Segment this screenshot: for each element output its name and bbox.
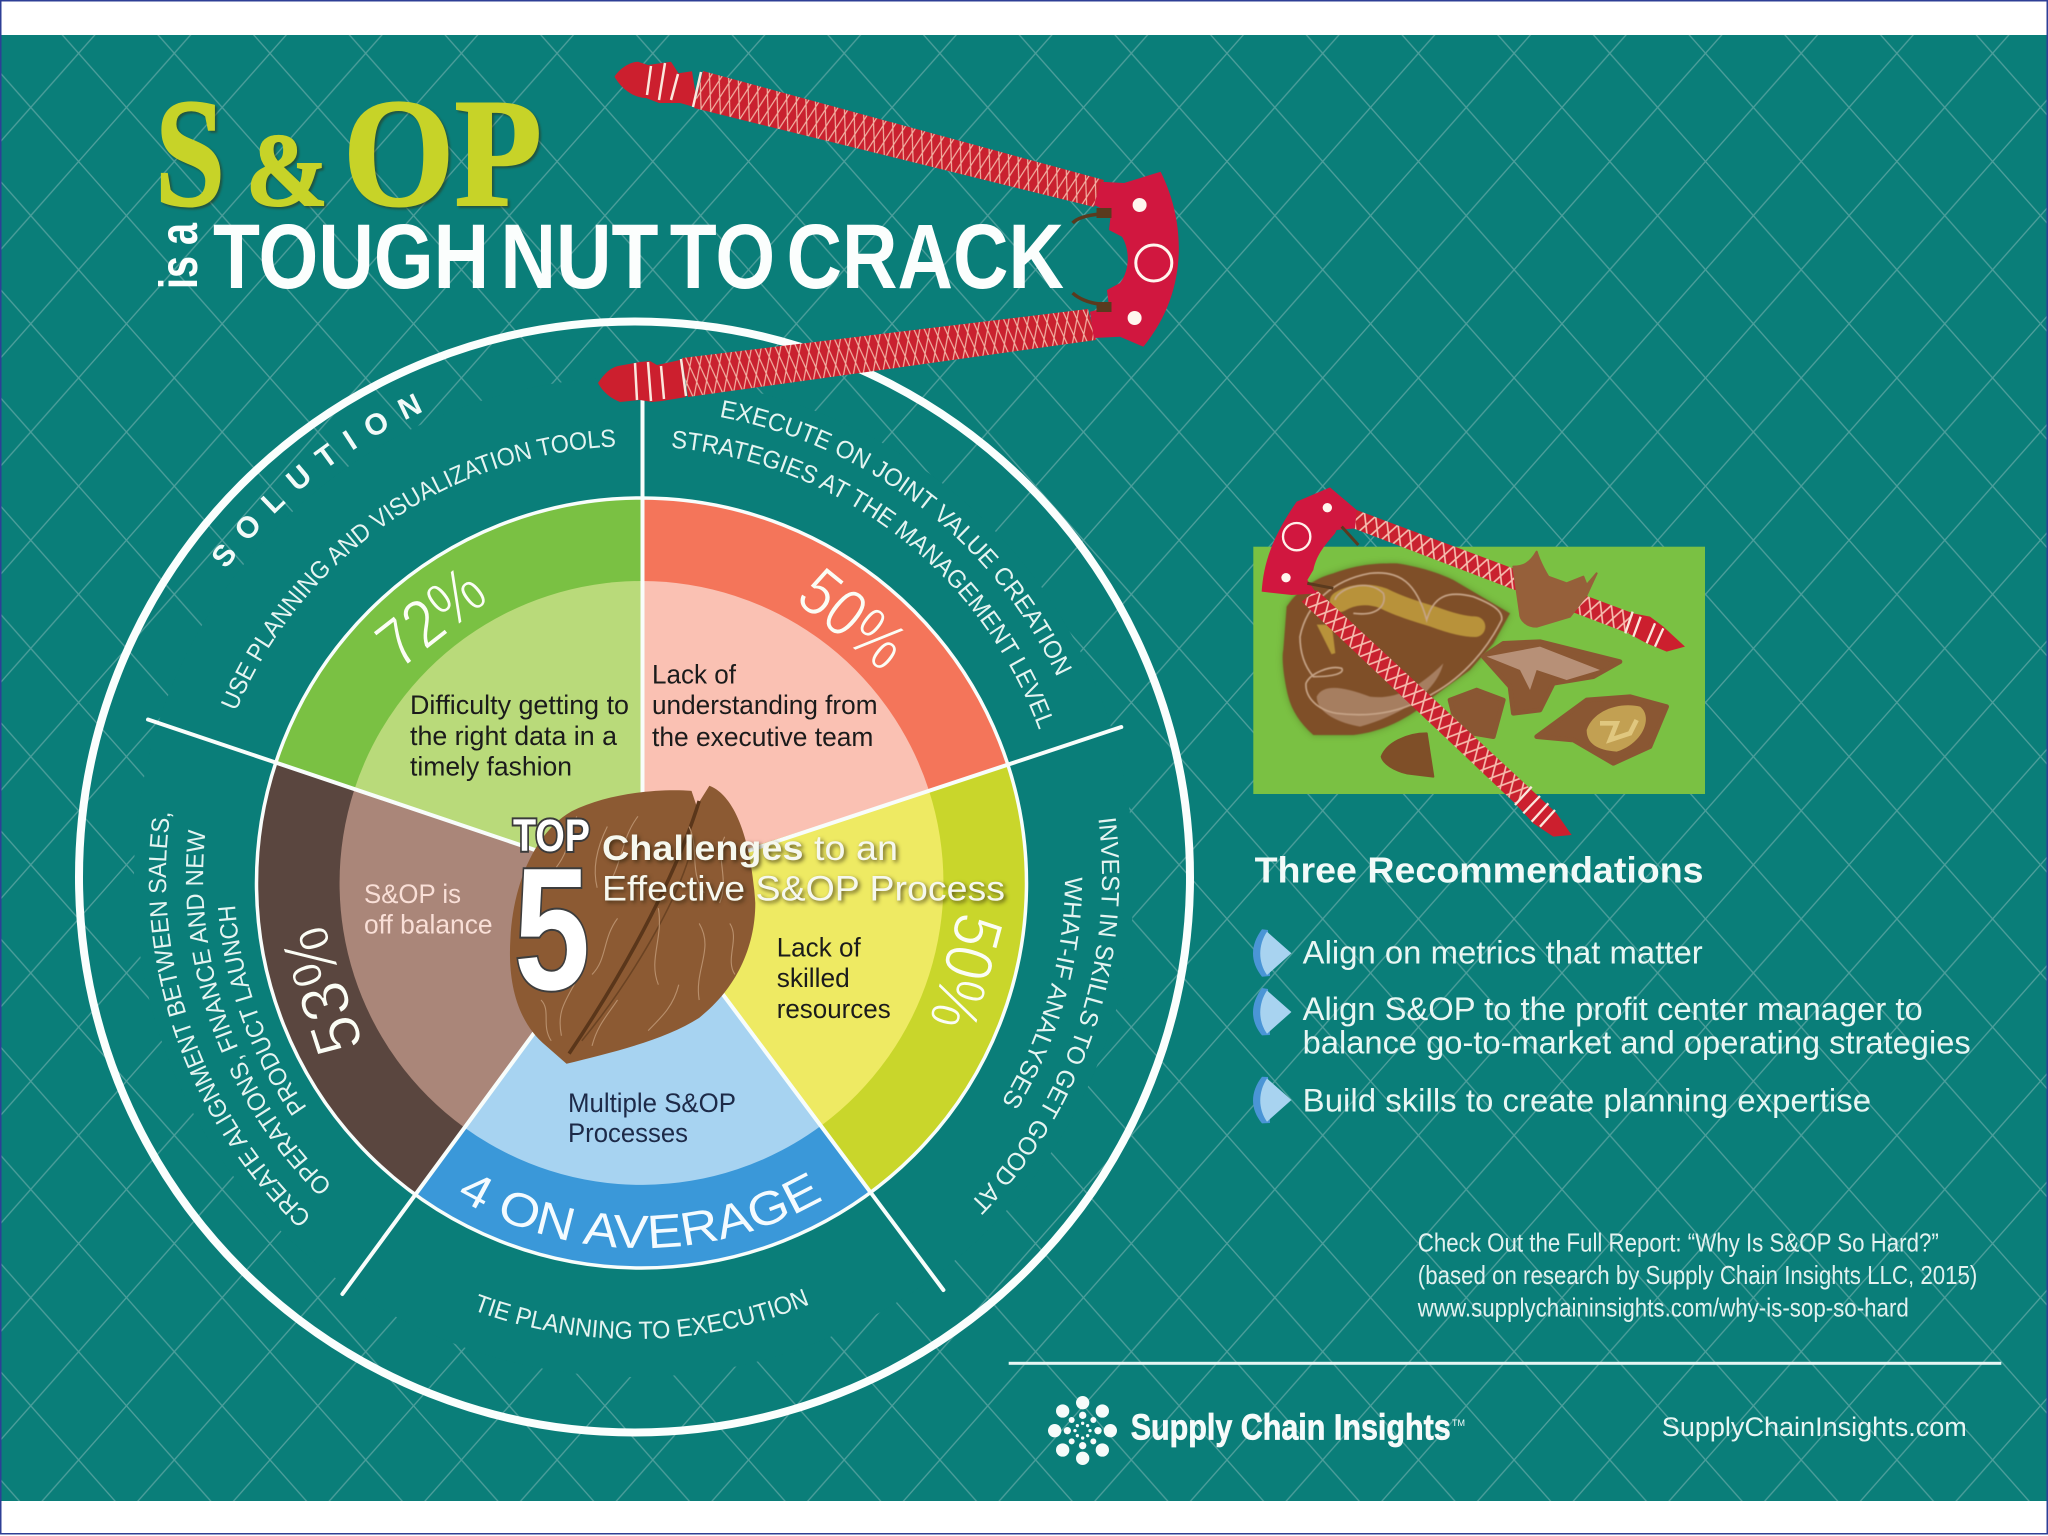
solution text: create alignment: OPERATIONS, FINANCE AND NEW	[186, 830, 329, 1194]
full report text	[1417, 1228, 1977, 1323]
top label: TOP	[513, 810, 590, 861]
full report text: www.supplychaininsights.com/why-is-sop-so-hard	[1417, 1293, 1909, 1323]
sector: skills 50%	[642, 764, 1027, 1192]
challenge text: data: Difficulty getting to	[410, 690, 629, 720]
percent: 4 on average: 4 ON AVERAGE	[460, 1172, 822, 1248]
recommendation 3: Build skills to create planning expertise	[1303, 1083, 1871, 1119]
sector: off balance 53%	[257, 764, 642, 1194]
challenge text: off balance: off balance	[364, 910, 493, 940]
challenge text: skilled resources: skilled	[777, 963, 850, 993]
challenge text: data	[410, 690, 629, 782]
nut fragment: right	[1537, 697, 1667, 763]
solution text: execute: EXECUTE ON JOINT VALUE CREATION	[721, 400, 1072, 676]
challenge text: multiple processes: Multiple S&OP	[568, 1088, 736, 1118]
challenge text: multiple processes	[568, 1088, 736, 1148]
handle two	[1302, 590, 1532, 803]
nut fragment: left	[1450, 690, 1503, 737]
logo wordmark: Supply Chain Insights	[1131, 1406, 1451, 1447]
recommendation 2: Align S&OP to the profit center manager to	[1303, 991, 1923, 1027]
challenge text: off balance: S&OP is	[364, 879, 461, 909]
solution text: invest in skills: INVEST IN SKILLS TO GET GOOD AT	[974, 818, 1120, 1215]
head	[1090, 172, 1179, 347]
percent: 50% executive: 50%	[784, 554, 921, 685]
challenge text: data: timely fashion	[410, 752, 572, 782]
solution text: create alignment: PRODUCT LAUNCH	[218, 906, 306, 1116]
icon: walnut	[510, 786, 755, 1064]
icon: supply chain insights logo	[1048, 1396, 1117, 1465]
logo wordmark: TM	[1452, 1418, 1465, 1428]
sector: data 72%	[275, 498, 642, 883]
solution heading arc: SOLUTION	[212, 393, 422, 566]
challenge text: skilled resources: resources	[777, 994, 891, 1024]
percent: 53%: 53%	[266, 918, 378, 1064]
solution text: execute: STRATEGIES AT THE MANAGEMENT LEVEL	[672, 430, 1052, 730]
icon: bullet 3	[1253, 1077, 1291, 1123]
icon: bullet 1	[1253, 929, 1291, 977]
sector: executive 50%	[642, 498, 1008, 883]
jaws	[1073, 208, 1104, 312]
wheel subtitle: Effective S&OP Process	[602, 870, 1005, 908]
outer white ring	[79, 322, 1190, 1432]
challenge text: skilled resources	[777, 933, 891, 1024]
title: S&OP: S	[155, 67, 225, 239]
title: S&OP: &	[246, 113, 328, 228]
big number 5: 5	[514, 831, 590, 1026]
percent: 72%: 72%	[362, 552, 500, 683]
challenge text: skilled resources: Lack of	[777, 933, 861, 963]
challenge text: executive	[652, 660, 878, 752]
title: S&OP: OP	[343, 67, 542, 239]
heading: three recommendations: Three Recommendations	[1255, 850, 1704, 891]
recommendation 1: Align on metrics that matter	[1303, 934, 1703, 970]
title: S&OP	[155, 67, 542, 239]
challenge text: multiple processes: Processes	[568, 1118, 688, 1148]
recommendation 2	[1303, 991, 1971, 1060]
challenge text: executive: understanding from	[652, 690, 878, 720]
icon: large nutcracker	[598, 62, 1179, 402]
solution text: planning tools: USE PLANNING AND VISUALIZATION TOOLS	[221, 430, 615, 708]
spokes	[148, 398, 1121, 1294]
recommendation 2: balance go-to-market and operating strategies	[1303, 1024, 1971, 1060]
nut fragment: middle	[1483, 642, 1620, 713]
pie chart: five challenges	[256, 498, 1027, 1268]
solution text: invest in skills: WHAT-IF ANALYSES	[1004, 878, 1082, 1108]
nut fragment: top	[1513, 552, 1597, 627]
nut fragment: small	[1382, 733, 1433, 777]
sector: processes 4 on average	[415, 883, 872, 1268]
challenge text: off balance	[364, 879, 493, 940]
wheel subtitle: Challenges to an	[602, 829, 898, 868]
title: tough nut to crack: TOUGH NUT TO CRACK	[213, 206, 1064, 308]
title: is a: is a	[149, 222, 209, 289]
challenge text: executive: the executive team	[652, 722, 873, 752]
nut shell	[1283, 563, 1510, 735]
solution text: create alignment: CREATE ALIGNMENT BETWEEN SALES,	[148, 814, 308, 1226]
upper handle	[614, 62, 1104, 207]
handle one	[1353, 510, 1633, 633]
percent: 50% skills: 50%	[914, 906, 1017, 1038]
lower handle	[598, 309, 1096, 402]
challenge text: executive: Lack of	[652, 660, 736, 690]
panel: wheel annulus	[79, 322, 1190, 1432]
website: SupplyChainInsights.com	[1662, 1412, 1967, 1442]
wheel subtitle	[602, 829, 1005, 908]
challenge text: data: the right data in a	[410, 721, 618, 751]
panel: cracked nut illustration	[1253, 487, 1705, 837]
icon: bullet 2	[1253, 988, 1291, 1035]
solution text: tie planning: TIE PLANNING TO EXECUTION	[478, 1288, 808, 1340]
head	[1262, 487, 1357, 595]
full report text: Check Out the Full Report: “Why Is S&OP So Hard?”	[1418, 1228, 1939, 1258]
